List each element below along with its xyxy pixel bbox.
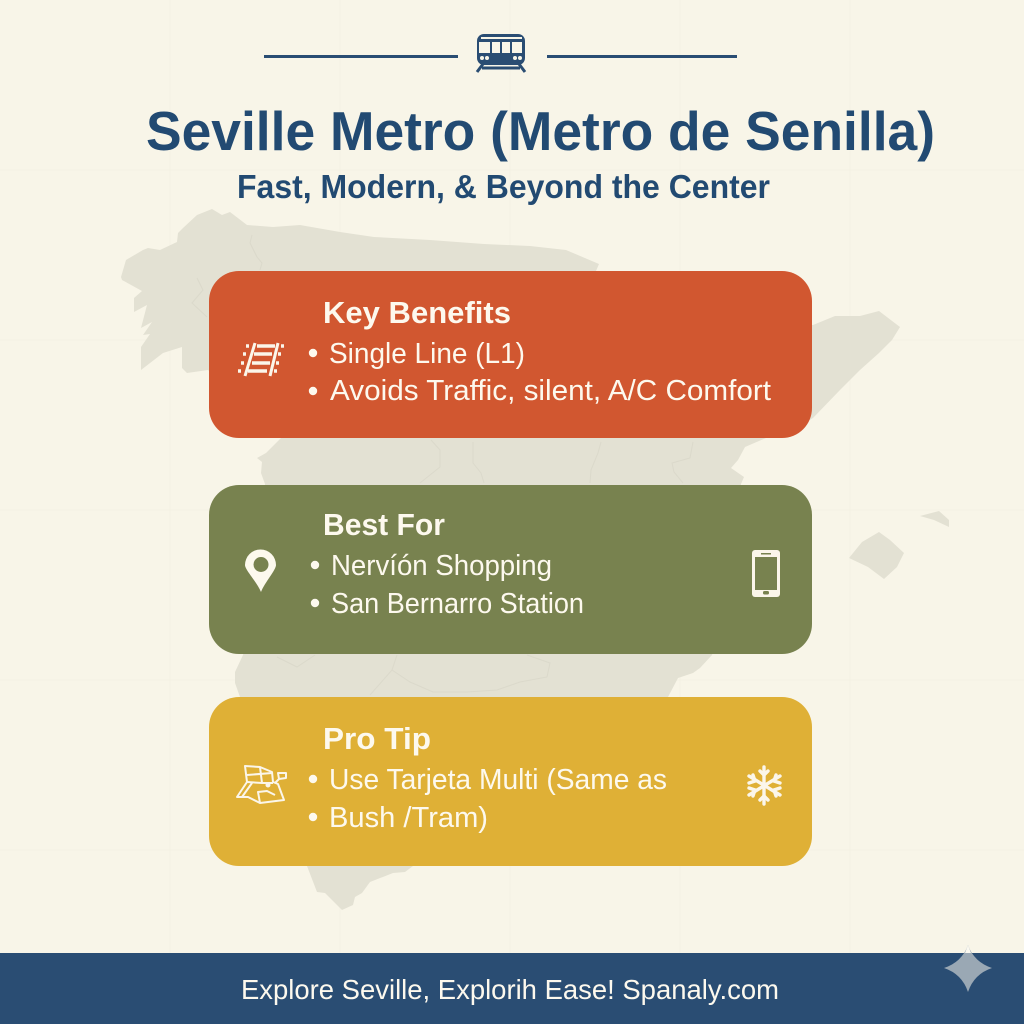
bullet list: pro tip: Use Tarjeta Multi (Same as (329, 764, 667, 796)
icon: map (237, 766, 286, 803)
bullet list: key benefits: Avoids Traffic, silent, A/C Comfort (330, 375, 771, 407)
icon: sparkle (944, 945, 992, 992)
icon: snowflake (749, 767, 780, 804)
bullet list: pro tip: Bush /Tram) (329, 802, 488, 834)
icon: smartphone (752, 550, 780, 597)
subtitle: Fast, Modern, & Beyond the Center (237, 168, 770, 205)
map: Mallorca (849, 532, 904, 579)
heading: pro tip: Pro Tip (323, 721, 431, 756)
bullet list: key benefits: Single Line (L1) (329, 338, 525, 370)
panel: key benefits (209, 271, 812, 438)
bullet list: best for: San Bernarro Station (331, 588, 584, 620)
bullet list: key benefits (309, 338, 771, 407)
footer band (0, 945, 1024, 1024)
background map of Spain (121, 209, 949, 910)
map: Menorca (920, 511, 949, 527)
panel: pro tip (209, 697, 812, 866)
footer text: Explore Seville, Explorih Ease! Spanaly.com (241, 974, 779, 1005)
bullet list: pro tip (309, 764, 667, 834)
icon: rail tracks (238, 343, 284, 376)
bullet list: best for (311, 550, 584, 620)
icon: location pin (245, 549, 276, 592)
panel: best for (209, 485, 812, 654)
heading: best for: Best For (323, 507, 445, 542)
heading: key benefits: Key Benefits (323, 295, 511, 330)
icon: train (477, 34, 525, 72)
header divider with train icon (264, 34, 737, 72)
bullet list: best for: Nervíón Shopping (331, 550, 552, 582)
title: Seville Metro (Metro de Senilla) (146, 100, 935, 162)
